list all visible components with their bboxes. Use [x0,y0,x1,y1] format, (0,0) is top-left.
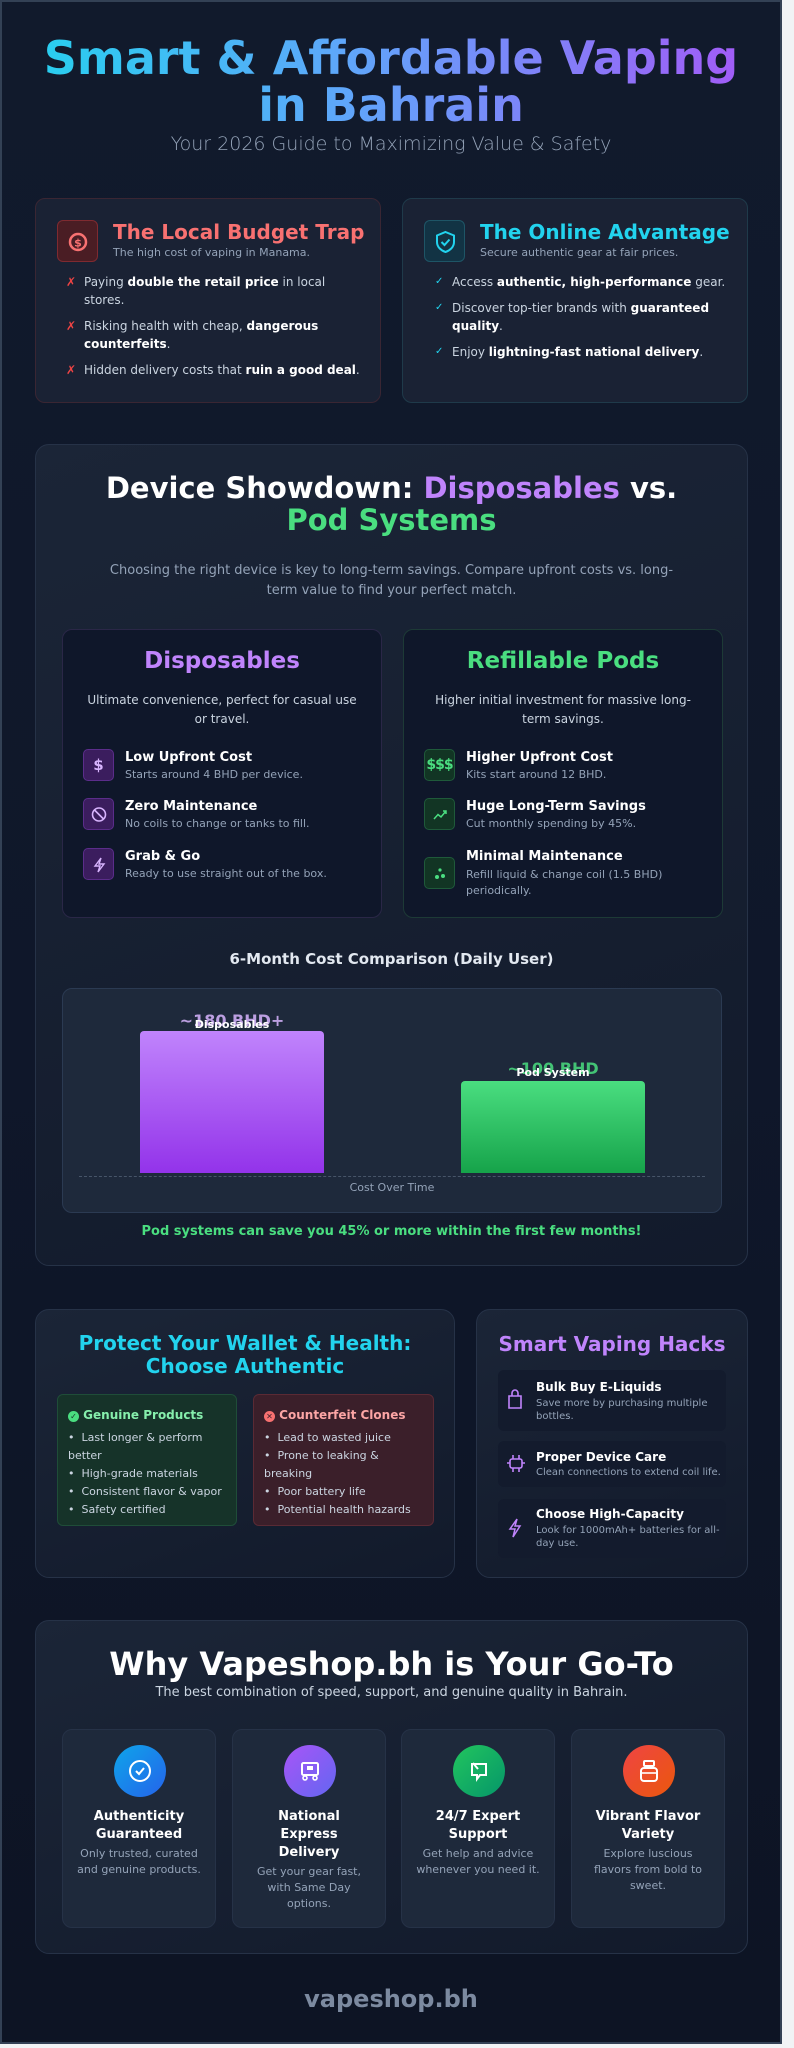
hack: bulk buy [498,1370,726,1431]
heading: Protect Your Wallet & Health: [79,1331,411,1355]
heading: Disposables [144,648,300,674]
box: genuine: Genuine Products [83,1408,203,1422]
hack: device care: Proper Device Care [536,1450,666,1464]
title: in Bahrain [258,78,524,132]
box: genuine: • Consistent flavor & vapor [68,1485,222,1498]
heading: Smart Vaping Hacks [498,1332,726,1356]
bar: pod system: Pod System [516,1066,590,1079]
item: grab and go: Grab & Go [125,849,200,864]
item: zero maintenance [83,798,310,830]
item: zero maintenance: No coils to change or tanks to fill. [125,817,310,830]
item: grab and go [83,848,327,880]
card: flavor: Explore luscious flavors from bold to sweet. [594,1847,702,1892]
item: low cost: $ [93,756,104,774]
hack: high capacity: Look for 1000mAh+ batteries for all-day use. [536,1525,720,1549]
box: genuine [57,1394,237,1526]
card: refillable pods [403,629,723,918]
item: higher cost: $$$ [426,757,453,773]
hack: bulk buy: Save more by purchasing multiple bottles. [536,1398,707,1422]
heading: Choose Authentic [146,1354,344,1378]
item: grab and go: Ready to use straight out of the box. [125,867,327,880]
box: genuine: • High-grade materials [68,1467,198,1480]
heading: The Local Budget Trap [113,220,364,244]
box: counterfeit [253,1394,434,1526]
box: genuine: • Safety certified [68,1503,166,1516]
panel: smart vaping hacks [476,1309,748,1578]
box: counterfeit: Counterfeit Clones [279,1408,405,1422]
card: flavor: Vibrant Flavor Variety [596,1809,700,1842]
footer brand: vapeshop.bh [304,1985,478,2013]
box: counterfeit: • Poor battery life [264,1485,366,1498]
hack: bulk buy: Bulk Buy E-Liquids [536,1380,662,1394]
heading: Device Showdown: Disposables vs. [106,471,677,505]
bar chart [62,988,722,1213]
icon: bottle [623,1745,675,1797]
list: problems [66,275,360,377]
subtitle: Your 2026 Guide to Maximizing Value & Safety [171,133,611,155]
heading [106,471,677,537]
heading: The Online Advantage [480,220,730,244]
panel: online advantage [402,198,748,403]
item: higher cost [424,749,613,781]
item: minimal maintenance [424,849,662,897]
card: authenticity: Authenticity Guaranteed [94,1809,184,1842]
panel: why vapeshop [35,1620,748,1954]
card: support [401,1729,555,1928]
item: minimal maintenance: Refill liquid & change coil (1.5 BHD) periodically. [466,868,662,897]
list: benefits: Discover top-tier brands with guaranteed quality. [452,301,709,333]
description: Higher initial investment for massive long-term savings. [435,693,691,726]
card: authenticity: Only trusted, curated and genuine products. [77,1847,201,1876]
heading: Pod Systems [286,503,497,537]
panel: local budget trap [35,198,381,403]
list: benefits: ✓ [435,302,443,313]
list: problems: Paying double the retail price in local stores. [84,275,325,307]
title [2,35,780,129]
item: low cost: Low Upfront Cost [125,750,252,765]
card: delivery: National Express Delivery [278,1809,340,1860]
subheading: Secure authentic gear at fair prices. [480,246,678,259]
item: higher cost: Kits start around 12 BHD. [466,768,606,781]
bar: pod system: ~100 BHD [507,1059,599,1078]
bar: disposables [140,1011,324,1173]
box: counterfeit: • Lead to wasted juice [264,1431,391,1444]
card: delivery [232,1729,386,1928]
icon: chat [453,1745,505,1797]
list: problems: Risking health with cheap, dangerous counterfeits. [84,319,318,351]
card: delivery: Get your gear fast, with Same Day options. [257,1865,361,1910]
heading: Refillable Pods [467,648,659,674]
hack: high capacity: Choose High-Capacity [536,1507,684,1521]
icon: coin [57,220,98,262]
list: benefits: Access authentic, high-performance gear. [452,275,725,289]
heading [79,1331,411,1378]
item: savings [424,798,646,830]
bar: disposables: Disposables [195,1018,269,1031]
card: disposables [62,629,382,918]
bar: pod system [461,1059,645,1173]
list: benefits: ✓ [435,276,443,287]
box: counterfeit: ✕ [266,1412,273,1421]
box: genuine: ✓ [70,1412,77,1421]
panel: device showdown [35,444,748,1266]
card: flavor [571,1729,725,1928]
list: problems: ✗ [66,275,76,289]
heading: Why Vapeshop.bh is Your Go-To [109,1645,674,1683]
icon: truck [284,1745,336,1797]
hack: device care: Clean connections to extend coil life. [536,1467,721,1478]
list: benefits: Enjoy lightning-fast national delivery. [452,345,703,359]
description: Choosing the right device is key to long-term savings. Compare upfront costs vs. long-term value to find your perfect match. [110,563,673,598]
list: benefits: ✓ [435,346,443,357]
list: problems: ✗ [66,319,76,333]
item: higher cost: Higher Upfront Cost [466,750,613,765]
bar: disposables: ~180 BHD+ [180,1011,284,1030]
list: benefits [435,275,725,359]
card: support: 24/7 Expert Support [436,1809,520,1842]
item: low cost [83,749,303,781]
savings callout: Pod systems can save you 45% or more within the first few months! [142,1224,641,1239]
card: authenticity [62,1729,216,1928]
axis label: Cost Over Time [350,1181,434,1194]
item: low cost: Starts around 4 BHD per device. [125,768,303,781]
subheading: The best combination of speed, support, and genuine quality in Bahrain. [155,1685,628,1700]
icon: check [114,1745,166,1797]
description: Ultimate convenience, perfect for casual use or travel. [87,693,357,726]
hack: high capacity [498,1499,726,1558]
list: problems: Hidden delivery costs that ruin a good deal. [84,363,360,377]
item: savings: Huge Long-Term Savings [466,799,646,814]
box: genuine: • Last longer & perform better [68,1431,202,1462]
box: counterfeit: • Potential health hazards [264,1503,411,1516]
hack: device care [498,1441,726,1487]
list: problems: ✗ [66,363,76,377]
title: Smart & Affordable Vaping [44,31,738,85]
panel: protect wallet [35,1309,455,1578]
icon: shield [424,220,465,262]
chart title: 6-Month Cost Comparison (Daily User) [229,950,554,968]
box: counterfeit: • Prone to leaking & breaking [264,1449,379,1480]
item: savings: Cut monthly spending by 45%. [466,817,636,830]
subheading: The high cost of vaping in Manama. [113,246,310,259]
item: minimal maintenance: Minimal Maintenance [466,849,623,864]
card: support: Get help and advice whenever you need it. [416,1847,540,1876]
item: zero maintenance: Zero Maintenance [125,799,257,814]
icon: coin: $ [74,236,82,250]
